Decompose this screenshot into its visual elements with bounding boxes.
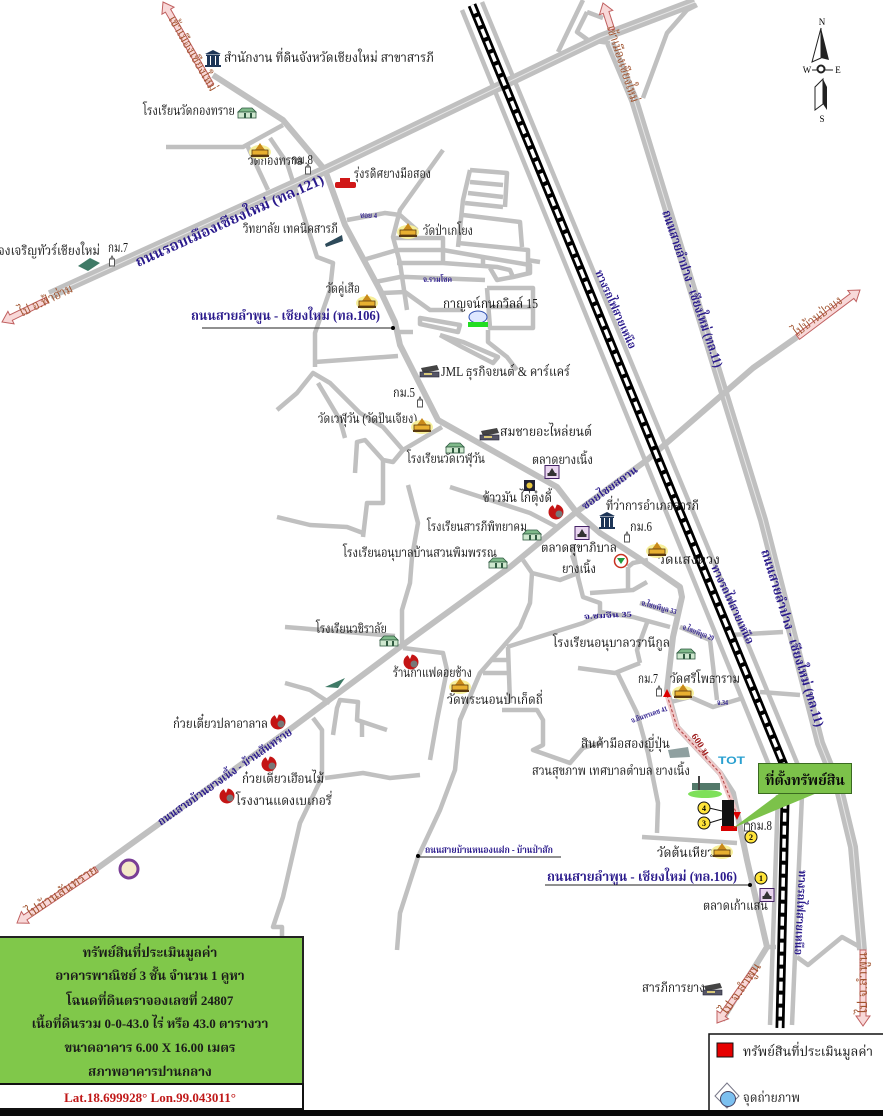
panel: property summary: ขนาดอาคาร 6.00 X 16.00 เมตร [64, 1040, 236, 1055]
panel: coordinates [0, 1084, 303, 1109]
label: to Ban Pa Yang: ไปบ้านป่าบง [788, 292, 845, 340]
place labels: รุ่งรดิศยางมือสอง [354, 165, 431, 182]
place labels: ข้าวมัน ไก่ตุ๋งดี้ [483, 487, 553, 506]
icons: restaurants [220, 504, 564, 804]
callout: property location [733, 764, 852, 828]
place labels: วัดศรีโพธาราม [670, 668, 740, 686]
panel: property summary: อาคารพาณิชย์ 3 ชั้น จำนวน 1 คูหา [55, 966, 245, 984]
place labels: วัดเวฬุวัน (วัดปันเจียง) [318, 411, 417, 427]
small soi labels: จ.34 [717, 698, 728, 707]
place labels: กาญจน์กนกวิลล์ 15 [443, 294, 538, 311]
place labels: โรงเรียนวัดกองทราย [142, 100, 235, 118]
main road 106 [213, 75, 767, 1020]
place labels: สินค้ามือสองญี่ปุ่น [581, 733, 670, 752]
arrow: southwest to Sankhamphaeng: ไปบ้านสันทราย [22, 861, 100, 921]
place labels: โรงเรียนอนุบาลบ้านสวนพิมพรรณ [342, 542, 497, 561]
km post icons [110, 164, 750, 831]
arrow: north to Chiang Mai old road: เข้าเมืองเชียงใหม่ [165, 12, 222, 94]
small soi labels: จ.ไชยพิบูล 33 [640, 598, 678, 616]
place labels: วัดป่าเกโยง [423, 220, 473, 238]
place labels: สวนสุขภาพ เทศบาลตำบล ยางเนิ้ง [532, 760, 690, 779]
Ban Yang Nueng road [95, 337, 797, 870]
road label: Soi Chaiyasathan: ซอยไชยสถาน [579, 462, 640, 512]
icon: municipality seal [120, 860, 138, 878]
small soi labels: จ.ชมจีน 35 [584, 609, 632, 621]
icon: college building [325, 235, 343, 247]
place labels: ตลาดสุขาภิบาล [541, 540, 617, 556]
place labels: กม.7 [638, 671, 658, 686]
place labels [0, 47, 772, 995]
place labels: โรงเรียนอนุบาลวรานีกูล [552, 632, 670, 651]
place labels: ตลาดยางเนิ้ง [532, 449, 593, 467]
icon: bank logo [614, 554, 628, 568]
icon: chicken rice sign [524, 480, 535, 491]
panel: property summary: เนื้อที่ดินรวม 0-0-43.0 ไร่ หรือ 43.0 ตารางวา [32, 1014, 268, 1031]
icons: markets [545, 466, 774, 902]
road label: Ban Nong Ngok [416, 843, 561, 858]
small soi labels: จ.รวมโชค [423, 275, 452, 284]
icons: factories [78, 258, 690, 758]
panel: legend: ทรัพย์สินที่ประเมินมูลค่า [743, 1041, 873, 1060]
arrow: south to Lamphun highway: ไป จ.ลำพูน [854, 952, 871, 1015]
compass [803, 17, 841, 124]
road label: railway south: ทางรถไฟสายเหนือ [792, 870, 812, 956]
road label: railway north: ทางรถไฟสายเหนือ [592, 267, 641, 351]
ring road 121 [50, 2, 695, 295]
callout: property location: ที่ตั้งทรัพย์สิน [765, 770, 845, 789]
arrow: north to Chiang Mai old road [157, 0, 222, 94]
small soi labels: จ.ไชยพิบูล 29 [681, 622, 715, 643]
place labels: ที่ว่าการอำเภอสารภี [606, 495, 699, 513]
place labels: กม.7 [108, 240, 128, 255]
icon: housing estate [468, 311, 488, 327]
place labels: ตลาดเก้าแสน [703, 897, 768, 913]
arrow: west to Saraphi [0, 280, 75, 328]
icon: land office [205, 50, 221, 67]
place labels: จงเจริญทัวร์เชียงใหม่ [0, 240, 100, 258]
place labels: JML ธุรกิจยนต์ & คาร์แคร์ [441, 362, 571, 380]
place labels: สมชายอะไหล่ยนต์ [500, 421, 592, 439]
photo points [698, 802, 767, 884]
place labels: ยางเนิ้ง [562, 558, 596, 576]
icon: health park [688, 776, 722, 798]
place labels: กม.5 [393, 385, 415, 400]
route distance [663, 689, 741, 820]
compass: E [835, 65, 841, 75]
place labels: กม.8 [750, 818, 772, 833]
place labels: ก๋วยเตี๋ยวปลาอาลาล [173, 713, 268, 731]
panel: legend [709, 1034, 883, 1114]
place labels: โรงเรียนวชิราลัย [315, 618, 387, 636]
place labels: วัดกองทราย [248, 153, 303, 168]
photo points: 4 [702, 804, 706, 813]
road label: Lampang Chiang Mai 1: ถนนสายลำปาง - เชียงใหม่ (ทล.11) [659, 208, 727, 369]
panel: property summary: โฉนดที่ดินตราจองเลขที่ 24807 [66, 991, 234, 1008]
compass: N [819, 17, 826, 27]
icon: district office [599, 512, 615, 529]
small soi labels: ซอย 4 [360, 211, 377, 220]
label: TOT: TOT [718, 755, 745, 767]
panel: coordinates: Lat.18.699928° Lon.99.043011° [64, 1090, 236, 1105]
place labels: วัดแสงดวง [658, 552, 720, 567]
photo points: 3 [702, 819, 706, 828]
road label: 106 south [545, 866, 752, 887]
road label: railway central: ทางรถไฟสายเหนือ [708, 562, 759, 646]
panel: property summary: ทรัพย์สินที่ประเมินมูลค่า [83, 943, 217, 961]
route distance: 600 ม. [689, 732, 712, 760]
road label: ring road 121: ถนนรอบเมืองเชียงใหม่ (ทล.121) [132, 169, 327, 271]
arrow: west to Saraphi: ไป อ.ฟ้าฮ่าม [15, 280, 75, 320]
road label: 106 north [191, 305, 395, 330]
railway [472, 5, 790, 1028]
place labels: สารภีการยาง [642, 980, 705, 995]
icons: schools [238, 108, 695, 659]
panel: legend: จุดถ่ายภาพ [743, 1089, 800, 1106]
road label: 106 south: ถนนสายลำพูน - เชียงใหม่ (ทล.106) [547, 866, 737, 885]
compass: W [803, 65, 812, 75]
icons: shops [420, 365, 722, 995]
place labels: โรงเรียนสารภีพิทยาคม [426, 516, 527, 534]
road label: Lampang Chiang Mai 2: ถนนสายลำปาง - เชียงใหม่ (ทล.11) [758, 547, 828, 729]
arrow: south to Lamphun: ไป จ.ลำพูน [716, 959, 765, 1019]
photo points: 2 [749, 833, 753, 842]
place labels: วัดคู่เสือ [326, 280, 360, 297]
small soi labels: จ.อินทรเดช 41 [630, 704, 669, 725]
small soi labels [360, 211, 728, 725]
arrow: south to Lamphun [710, 959, 765, 1028]
place labels: ร้านกาแฟดอยช้าง [393, 664, 472, 680]
bottom black bar [0, 1110, 883, 1116]
road label: Ban Nong Ngok: ถนนสายบ้านหนองแฝก - บ้านป่าสัก [425, 843, 553, 856]
road label: 106 north: ถนนสายลำพูน - เชียงใหม่ (ทล.106) [191, 305, 380, 324]
arrow: northeast to Ban Pa Yang [793, 284, 864, 343]
icon: red car [335, 178, 356, 188]
photo points: 1 [759, 874, 763, 883]
arrow: top to Chiang Mai: เข้าเมืองเชียงใหม่ [604, 23, 644, 104]
place labels: สำนักงาน ที่ดินจังหวัดเชียงใหม่ สาขาสารภี [224, 47, 434, 65]
place labels: โรงเรียนวัดเวฬุวัน [406, 448, 485, 467]
property building [721, 800, 737, 831]
arrow: south to Lamphun highway [854, 950, 871, 1026]
highway 11 [610, 43, 862, 950]
arrow: top to Chiang Mai [596, 0, 644, 104]
road label: Yang Nueng Sankhamphaeng: ถนนสายบ้านยางเนิ้ง - บ้านสันทราย [154, 723, 295, 828]
place labels: โรงงานแดงเบเกอรี่ [235, 790, 332, 808]
place labels: วัดต้นเหียว [657, 844, 714, 860]
compass: S [819, 114, 825, 124]
place labels: ก๋วยเตี๋ยวเฮือนไม้ [242, 768, 324, 786]
place labels: วิทยาลัย เทคนิคสารภี [243, 221, 338, 236]
icons: temples [249, 143, 733, 859]
place labels: วัดพระนอนป่าเก็ดถี่ [447, 689, 543, 707]
place labels: กม.6 [630, 519, 652, 534]
place labels: กม.8 [291, 152, 313, 167]
panel: property summary: สภาพอาคารปานกลาง [88, 1064, 212, 1079]
panel: property summary [0, 937, 303, 1084]
